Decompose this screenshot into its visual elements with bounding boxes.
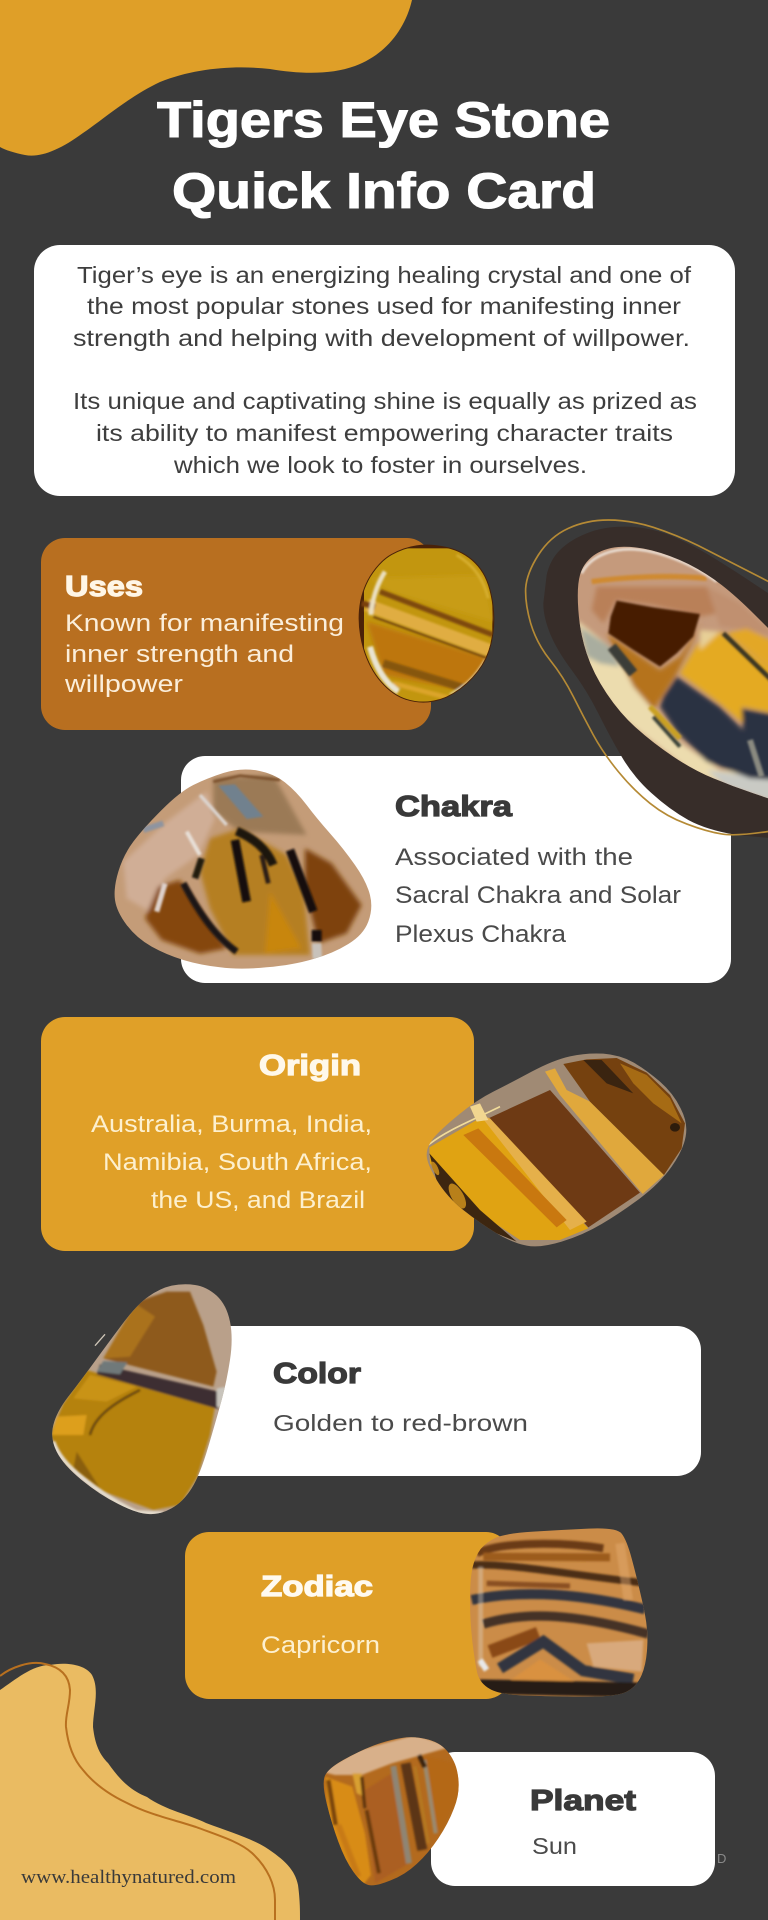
stone: origin xyxy=(427,1053,686,1246)
panel: introduction: strength and helping with development of willpower. xyxy=(73,325,690,351)
text: chakra description xyxy=(395,844,681,948)
stone: color xyxy=(50,1284,232,1514)
panel: introduction xyxy=(34,245,735,496)
text: uses description: Known for manifesting xyxy=(65,610,344,637)
text: planet description: Sun xyxy=(532,1833,577,1859)
title: Quick Info Card xyxy=(172,163,596,219)
text: zodiac description: Capricorn xyxy=(261,1632,380,1659)
stone: planet xyxy=(322,1735,459,1887)
heading: origin: Origin xyxy=(259,1050,361,1082)
heading: zodiac: Zodiac xyxy=(261,1571,373,1603)
panel: uses xyxy=(41,538,431,730)
panel: introduction: its ability to manifest empowering character traits xyxy=(96,420,673,446)
panel: chakra xyxy=(181,756,731,983)
stone body xyxy=(577,547,768,803)
text: uses description: inner strength and xyxy=(65,641,294,668)
text: chakra description: Associated with the xyxy=(395,844,633,871)
background blob: top left xyxy=(0,0,412,156)
panel: color xyxy=(160,1326,701,1476)
background blob: bottom left xyxy=(0,1663,300,1920)
text: origin description xyxy=(91,1111,372,1214)
title: Tigers Eye Stone xyxy=(157,92,610,148)
text: origin description: the US, and Brazil xyxy=(151,1187,365,1214)
panel: introduction: which we look to foster in ourselves. xyxy=(173,452,587,478)
stone: large stone with backdrop blob xyxy=(526,520,768,838)
stray letter: D: D xyxy=(717,1851,726,1866)
heading: color: Color xyxy=(273,1358,361,1390)
panel: zodiac xyxy=(185,1532,510,1699)
text: color description: Golden to red-brown xyxy=(273,1410,528,1436)
text: origin description: Australia, Burma, India, xyxy=(91,1111,372,1138)
panel: introduction: Tiger’s eye is an energizing healing crystal and one of xyxy=(77,262,692,288)
text: origin description: Namibia, South Africa, xyxy=(103,1149,372,1176)
panel: introduction: Its unique and captivating shine is equally as prized as xyxy=(73,388,697,414)
stone: uses oval xyxy=(360,546,493,702)
panel: origin xyxy=(41,1017,474,1251)
stone: zodiac xyxy=(470,1528,648,1697)
footer: website url: www.healthynatured.com xyxy=(21,1867,236,1888)
text: chakra description: Plexus Chakra xyxy=(395,921,567,948)
text: uses description xyxy=(64,610,344,698)
backdrop blob xyxy=(543,527,768,838)
title xyxy=(157,92,610,219)
text: chakra description: Sacral Chakra and Solar xyxy=(395,882,681,909)
outline curve xyxy=(526,520,768,835)
heading: planet: Planet xyxy=(530,1785,636,1817)
panel: planet xyxy=(431,1752,715,1886)
text: uses description: willpower xyxy=(64,671,183,698)
panel: introduction: the most popular stones used for manifesting inner xyxy=(87,293,681,319)
heading: chakra: Chakra xyxy=(395,791,513,823)
stone: chakra xyxy=(115,769,371,969)
curved accent line xyxy=(0,1663,275,1920)
scratch mark xyxy=(95,1334,105,1346)
heading: uses: Uses xyxy=(65,571,143,603)
